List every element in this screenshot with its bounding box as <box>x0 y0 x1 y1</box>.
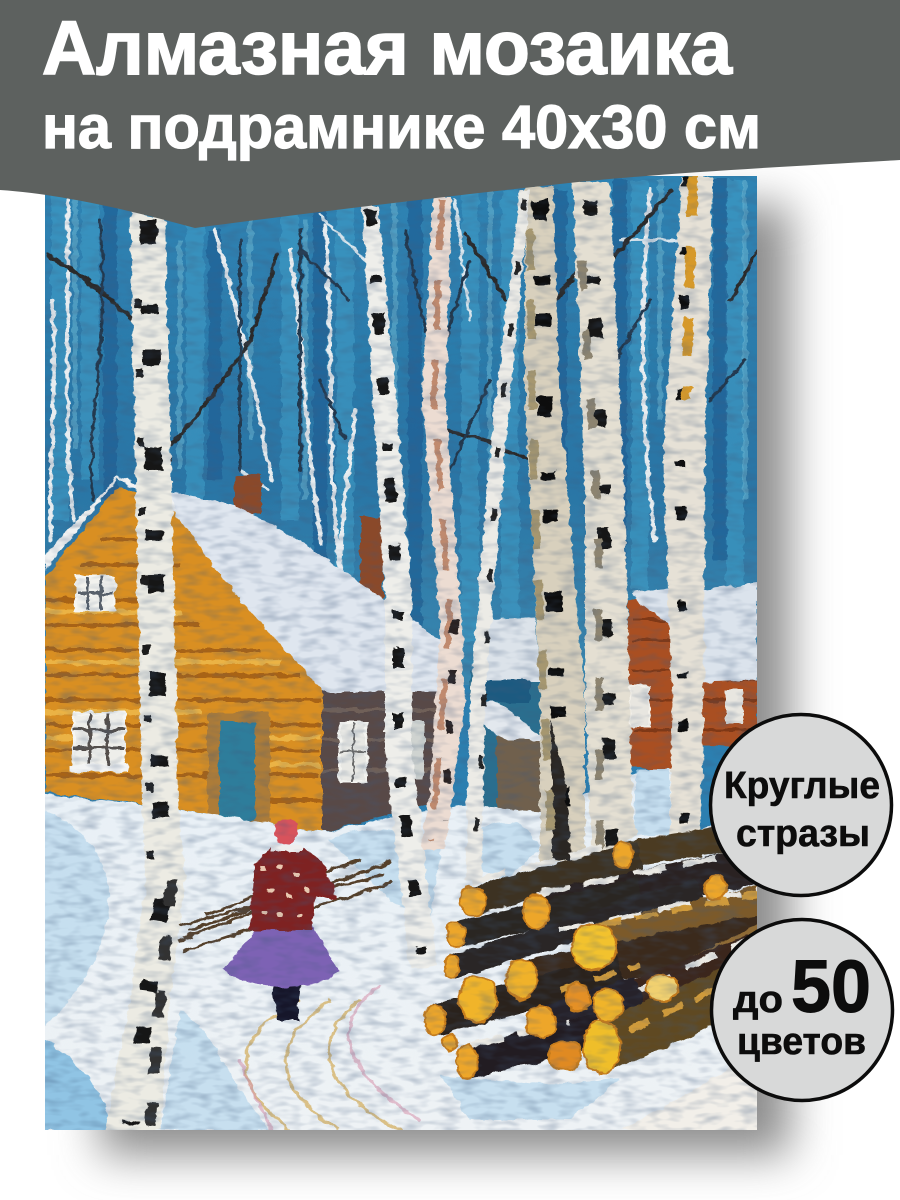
birch 2 <box>362 205 437 970</box>
header banner <box>0 0 900 228</box>
sky <box>30 165 770 685</box>
snowy roof <box>118 478 440 692</box>
side wing of house <box>320 690 445 832</box>
birch 5 <box>525 187 585 862</box>
badge: up to 50 colours: цветов <box>737 1021 866 1063</box>
back blue house <box>470 617 542 820</box>
subtitle: на подрамнике 40х30 см <box>42 93 761 161</box>
canvas drop shadow <box>100 205 790 1155</box>
background thin trees and branches <box>47 190 757 575</box>
legs <box>272 980 300 1020</box>
painting: winter village with birches <box>30 165 780 1140</box>
birch trees <box>105 177 713 1130</box>
title: Алмазная мозаика <box>42 6 733 91</box>
birch 3 <box>420 197 465 850</box>
badge: round rhinestones: стразы <box>736 813 870 855</box>
snow ground <box>30 770 770 1140</box>
chimneys <box>235 474 383 602</box>
birch 4 <box>465 190 530 880</box>
birch 6 <box>573 182 636 860</box>
door <box>208 712 270 826</box>
log pile <box>425 830 780 1079</box>
woman carrying firewood <box>178 820 392 1020</box>
skirt <box>224 925 340 987</box>
orange log house <box>45 476 322 832</box>
blouse <box>250 847 338 930</box>
badge: round rhinestones <box>710 714 892 896</box>
window: gable <box>76 577 114 611</box>
back right red house <box>628 582 757 780</box>
bundle of sticks <box>178 860 392 952</box>
badge: up to 50 colours <box>712 920 892 1100</box>
badge: round rhinestones: Круглые <box>724 765 880 807</box>
window: lower left <box>70 713 128 772</box>
head scarf <box>274 820 298 844</box>
badge: up to 50 colours: до <box>733 979 783 1021</box>
birch 1 <box>105 212 185 1130</box>
log ends <box>425 842 727 1079</box>
birch 7 <box>663 177 713 835</box>
badge: up to 50 colours: 50 <box>791 945 871 1028</box>
